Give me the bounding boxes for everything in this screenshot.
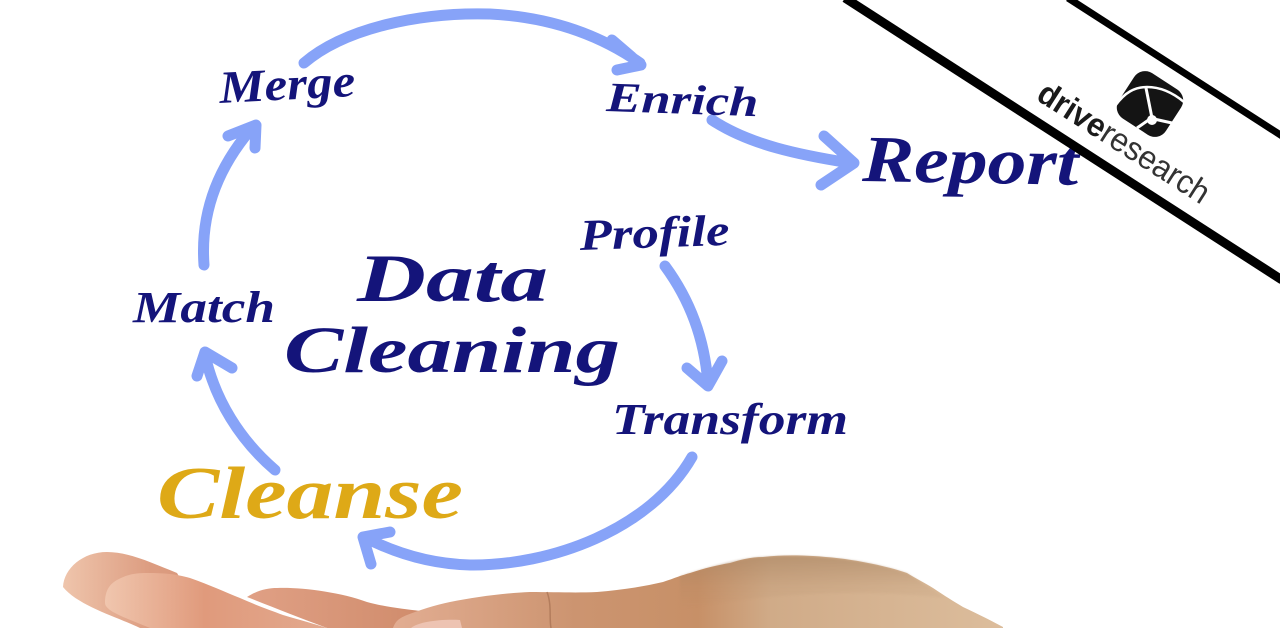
label: cleaning: Cleaning: [284, 314, 620, 387]
arrow: match to merge: [203, 125, 256, 265]
palm and thumb: [393, 555, 1003, 628]
label: enrich: Enrich: [604, 75, 759, 126]
label: data: Data: [356, 240, 548, 316]
arrow: merge to enrich: [304, 14, 641, 70]
label: transform: Transform: [612, 395, 848, 444]
label: report: Report: [861, 123, 1081, 200]
label: profile: Profile: [577, 206, 730, 260]
logo: drive research: [1031, 66, 1217, 211]
label: cleanse: Cleanse: [157, 453, 463, 535]
thumb nail: [411, 620, 462, 628]
arrow: cleanse to match: [197, 352, 275, 470]
arrow: transform to cleanse: [363, 457, 692, 565]
arrow: profile to transform: [665, 266, 722, 386]
palm top shading: [680, 556, 945, 610]
arrow: enrich to report: [712, 120, 854, 185]
thumb crease: [547, 592, 551, 628]
hand: [63, 552, 1003, 628]
label: match: Match: [132, 283, 275, 332]
front finger: [105, 573, 327, 628]
logo icon: steering wheel: [1112, 66, 1188, 142]
label: merge: Merge: [217, 55, 356, 113]
logo wordmark: driveresearch: [1031, 74, 1217, 211]
banner: logo stripe: [845, 0, 1280, 280]
back finger: [63, 552, 210, 628]
third finger: [247, 588, 420, 628]
